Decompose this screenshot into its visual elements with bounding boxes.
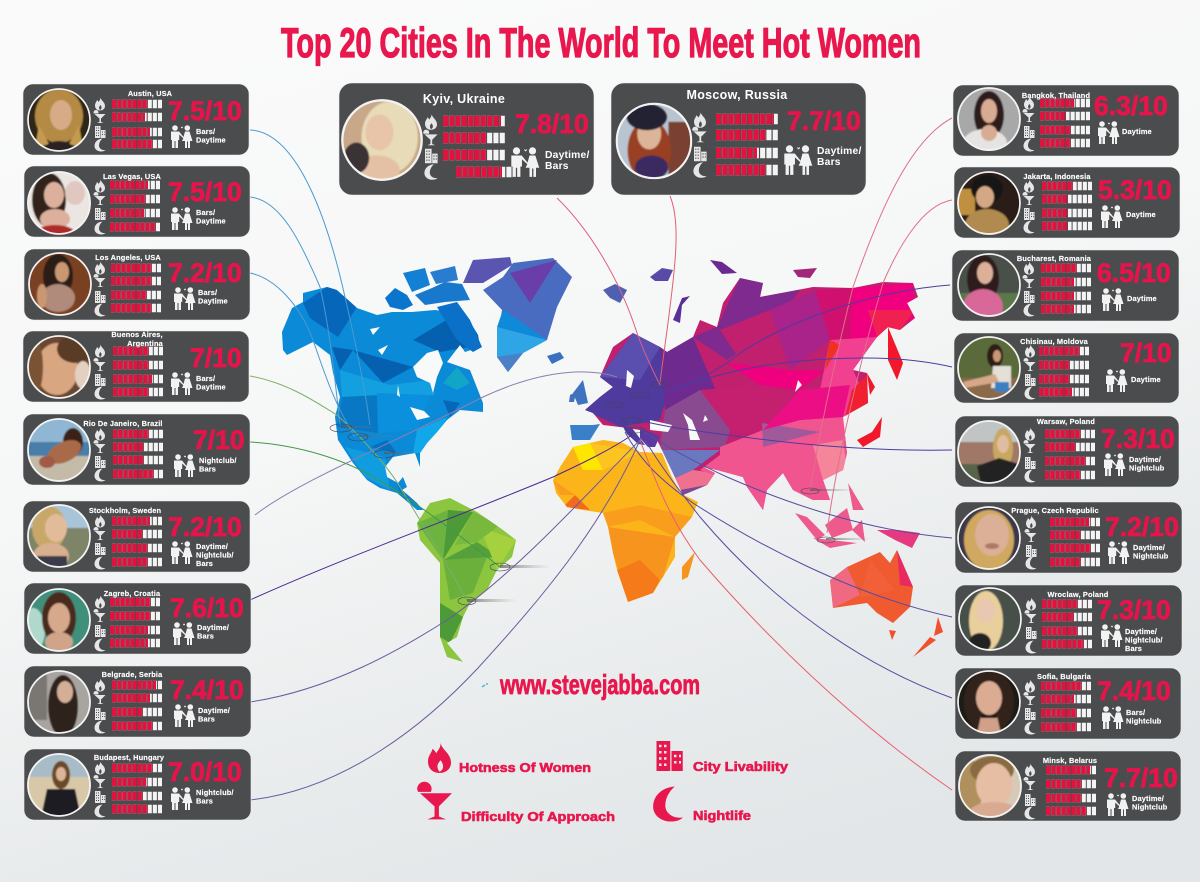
best places: Daytime [1126, 210, 1156, 219]
score: 7.8/10 [515, 109, 589, 139]
rating bars [1046, 770, 1097, 811]
score: 7/10 [190, 343, 242, 373]
icon: moon [653, 786, 683, 822]
rating icons [1024, 598, 1036, 654]
score: 7.3/10 [1097, 595, 1171, 625]
best places: Daytime [198, 296, 228, 306]
best places: Bars/ [198, 288, 217, 297]
rating icons [1022, 262, 1034, 316]
rating bars [112, 685, 163, 726]
Britain and Ireland [569, 380, 588, 405]
rating icons [94, 180, 106, 234]
city name: Sofia, Bulgaria [1037, 672, 1092, 681]
rating bars [113, 351, 164, 392]
city name: Budapest, Hungary [94, 753, 165, 762]
icon: couple [171, 125, 192, 148]
city name: Moscow, Russia [687, 88, 788, 102]
icon: couple [1101, 624, 1122, 647]
card: Wroclaw, Poland [955, 585, 1182, 656]
city name: Kyiv, Ukraine [423, 92, 505, 106]
Tasmania and New Zealand [889, 617, 943, 657]
lakes and Hudson Bay [370, 327, 443, 420]
rating icons [1022, 96, 1034, 152]
best places: Bars [196, 559, 213, 568]
card: Rio De Janeiro, Brazil [23, 414, 250, 485]
photo: Sofia [957, 670, 1021, 734]
score: 7.6/10 [170, 593, 244, 623]
city name: Bucharest, Romania [1017, 254, 1092, 263]
best places: Daytime [196, 136, 226, 144]
icon: couple [171, 372, 192, 395]
rating icons [94, 596, 106, 652]
photo: Bangkok [957, 87, 1021, 157]
city name: Belgrade, Serbia [102, 670, 163, 679]
photo: Los Angeles [28, 252, 92, 316]
card: Minsk, Belarus [955, 751, 1181, 822]
best places: Bars/ [196, 208, 215, 217]
photo: Warsaw [957, 420, 1021, 484]
score: 7.5/10 [168, 96, 242, 126]
legend label: hotness: Hotness Of Women [459, 760, 591, 775]
score: 7.5/10 [168, 177, 242, 207]
Africa [553, 440, 698, 602]
card: Bangkok, Thailand [953, 85, 1179, 157]
photo: Las Vegas [27, 171, 91, 241]
card: Jakarta, Indonesia [954, 167, 1180, 241]
photo: Jakarta [957, 171, 1021, 241]
score: 7.7/10 [787, 106, 861, 136]
rating icons [94, 428, 106, 482]
city name: Prague, Czech Republic [1011, 506, 1099, 515]
icon: couple [173, 622, 194, 645]
icon: couple [174, 704, 196, 727]
icon: couple [1104, 453, 1126, 476]
rating icons [692, 112, 707, 178]
card: Belgrade, Serbia [24, 666, 251, 737]
rating bars [1045, 434, 1096, 475]
rating bars [1040, 103, 1091, 143]
photo: Budapest [27, 753, 91, 817]
rating bars [111, 268, 162, 308]
card: Sofia, Bulgaria [955, 668, 1181, 739]
rating icons [94, 514, 106, 570]
score: 6.5/10 [1097, 258, 1171, 288]
photo: Minsk [956, 754, 1022, 822]
best places: Daytime/ [1133, 543, 1165, 552]
card: Zagreb, Croatia [21, 583, 251, 654]
best places: Daytime [1131, 375, 1161, 384]
icon: couple [171, 207, 192, 230]
photo: Chisinau [957, 336, 1021, 400]
best places: Nightclub [1126, 716, 1162, 726]
Madagascar [682, 552, 695, 580]
icon: couple [174, 287, 196, 310]
icon: couple [511, 147, 539, 177]
Greenland [483, 258, 572, 372]
city name: Rio De Janeiro, Brazil [83, 419, 163, 428]
icon: couple [1108, 541, 1130, 564]
icon: building [656, 741, 683, 771]
icon: hotness flame [428, 743, 451, 773]
score: 7/10 [193, 425, 245, 455]
score: 6.3/10 [1094, 91, 1168, 121]
icon: couple [1098, 121, 1120, 144]
best places: Bars [197, 632, 214, 640]
best places: Daytime/ [1132, 794, 1164, 803]
best places: Daytime/ [198, 706, 230, 715]
card: Austin, USA [23, 84, 249, 159]
city name: Warsaw, Poland [1037, 417, 1095, 426]
rating bars [1042, 186, 1093, 226]
rating icons [94, 344, 106, 400]
North America [282, 287, 483, 510]
icon: couple [171, 787, 192, 810]
rating bars [716, 119, 779, 170]
score: 7.4/10 [1097, 676, 1171, 706]
website url: www.stevejabba.com [499, 669, 700, 700]
best places: Daytime/ [1125, 627, 1157, 636]
best places: Nightclub [1129, 464, 1165, 472]
city name: Stockholm, Sweden [89, 506, 162, 515]
photo: Austin [27, 88, 91, 159]
city name: Las Vegas, USA [103, 172, 161, 181]
best places: Daytime/ [817, 146, 862, 157]
score: 7.2/10 [168, 258, 242, 288]
card: Bucharest, Romania [952, 250, 1179, 325]
Arctic islands [385, 257, 512, 352]
legend label: livability: City Livability [693, 759, 789, 774]
photo: Bucharest [957, 253, 1021, 317]
rating bars [110, 185, 161, 227]
score: 7.4/10 [170, 675, 244, 705]
rating icons [94, 98, 106, 152]
rating icons [1024, 764, 1036, 820]
best places: Bars [198, 714, 215, 724]
photo: Prague [957, 506, 1021, 570]
card: Moscow, Russia [611, 83, 866, 195]
card: Chisinau, Moldova [954, 333, 1179, 403]
legend label: difficulty: Difficulty Of Approach [461, 809, 615, 824]
card: Buenos Aires, Argentina [23, 330, 249, 402]
photo: Stockholm [27, 504, 91, 569]
rating icons [94, 678, 106, 734]
rating bars [112, 521, 163, 562]
best places: Daytime/ [197, 623, 229, 632]
card: Prague, Czech Republic [955, 502, 1182, 573]
rating icons [1022, 180, 1034, 234]
rating bars [443, 121, 513, 172]
best places: Nightclub [1132, 802, 1168, 812]
rating icons [94, 762, 106, 818]
icon: couple [1101, 205, 1122, 228]
photo: Moscow [616, 103, 692, 182]
icon: couple [1102, 706, 1124, 729]
city name: Los Angeles, USA [95, 253, 161, 262]
legend [417, 741, 789, 824]
rating bars [112, 104, 163, 144]
best places: Nightclub/ [196, 550, 234, 560]
icon: couple [1107, 793, 1128, 816]
card: Los Angeles, USA [24, 249, 250, 320]
rating icons [423, 114, 438, 180]
rating icons [1024, 516, 1036, 570]
rating icons [1024, 428, 1036, 482]
photo: Kyiv [341, 99, 423, 186]
best places: Bars [817, 157, 841, 168]
city name: Austin, USA [128, 89, 173, 98]
best places: Daytime [196, 382, 226, 392]
score: 7.0/10 [168, 757, 242, 787]
best places: Nightclub/ [199, 456, 237, 465]
score: 7.2/10 [168, 512, 242, 542]
city name: Minsk, Belarus [1043, 756, 1097, 765]
Iceland and northern islands [547, 260, 817, 364]
best places: Daytime/ [196, 542, 228, 551]
Australia [830, 550, 913, 623]
photo: Belgrade [27, 670, 91, 737]
best places: Bars/ [196, 127, 215, 136]
best places: Daytime [1127, 294, 1157, 303]
icon: couple [171, 541, 192, 564]
best places: Nightclub [1133, 552, 1169, 560]
world map [260, 257, 943, 687]
photo: Wroclaw [958, 587, 1022, 653]
city name: Buenos Aires, [111, 330, 163, 339]
rating bars [112, 768, 163, 809]
best places: Bars/ [196, 374, 215, 383]
South America [417, 498, 516, 662]
city name: Chisinau, Moldova [1020, 337, 1089, 346]
best places: Bars [545, 161, 569, 172]
rating bars [113, 434, 164, 474]
rating icons [1024, 680, 1036, 734]
rating bars [1041, 686, 1092, 727]
score: 7.2/10 [1105, 512, 1179, 542]
city name: Jakarta, Indonesia [1023, 172, 1091, 181]
card: Kyiv, Ukraine [339, 83, 594, 195]
title: Top 20 Cities In The World To Meet Hot Women [281, 19, 921, 66]
best places: Daytime/ [1129, 455, 1161, 464]
best places: Nightclub/ [196, 788, 234, 797]
city name: Wroclaw, Poland [1048, 590, 1109, 599]
score: 7.3/10 [1101, 424, 1175, 454]
rating bars [1042, 604, 1093, 644]
best places: Daytime [196, 216, 226, 226]
small teal marks [482, 684, 488, 687]
best places: Daytime/ [545, 150, 590, 161]
Eurasia [580, 270, 925, 515]
card: Budapest, Hungary [24, 749, 251, 820]
rating bars [1039, 351, 1090, 392]
icon: cocktail [417, 782, 452, 819]
Southeast Asia islands [795, 483, 920, 548]
best places: Bars [1125, 644, 1142, 653]
best places: Bars [199, 464, 216, 474]
photo: Rio [27, 418, 91, 482]
icon: couple [1106, 369, 1128, 392]
best places: Nightclub/ [1125, 636, 1163, 644]
city name: Argentina [127, 339, 164, 348]
rating icons [1024, 344, 1036, 400]
inland seas [626, 370, 802, 440]
best places: Bars [196, 796, 213, 806]
icon: couple [174, 454, 196, 477]
card: Warsaw, Poland [955, 416, 1179, 487]
score: 5.3/10 [1098, 175, 1172, 205]
best places: Bars/ [1126, 708, 1145, 717]
rating bars [110, 602, 161, 643]
city name: Bangkok, Thailand [1022, 91, 1090, 100]
city location markers [330, 382, 871, 605]
best places: Daytime [1122, 127, 1152, 136]
legend label: nightlife: Nightlife [693, 808, 751, 823]
card: Las Vegas, USA [24, 166, 250, 241]
rating bars [1041, 268, 1092, 309]
rating bars [1050, 522, 1101, 562]
icon: couple [784, 145, 812, 175]
score: 7.7/10 [1104, 763, 1178, 793]
city name: Zagreb, Croatia [104, 589, 161, 598]
score: 7/10 [1120, 338, 1172, 368]
rating icons [94, 262, 106, 316]
photo: Zagreb [21, 588, 91, 652]
connector lines [250, 118, 952, 800]
Kamchatka, Sakhalin, Japan [857, 327, 903, 447]
photo: Buenos Aires [27, 335, 93, 399]
Spain, Italy, Balkans [570, 424, 660, 447]
icon: couple [1102, 288, 1124, 311]
card: Stockholm, Sweden [23, 501, 250, 572]
